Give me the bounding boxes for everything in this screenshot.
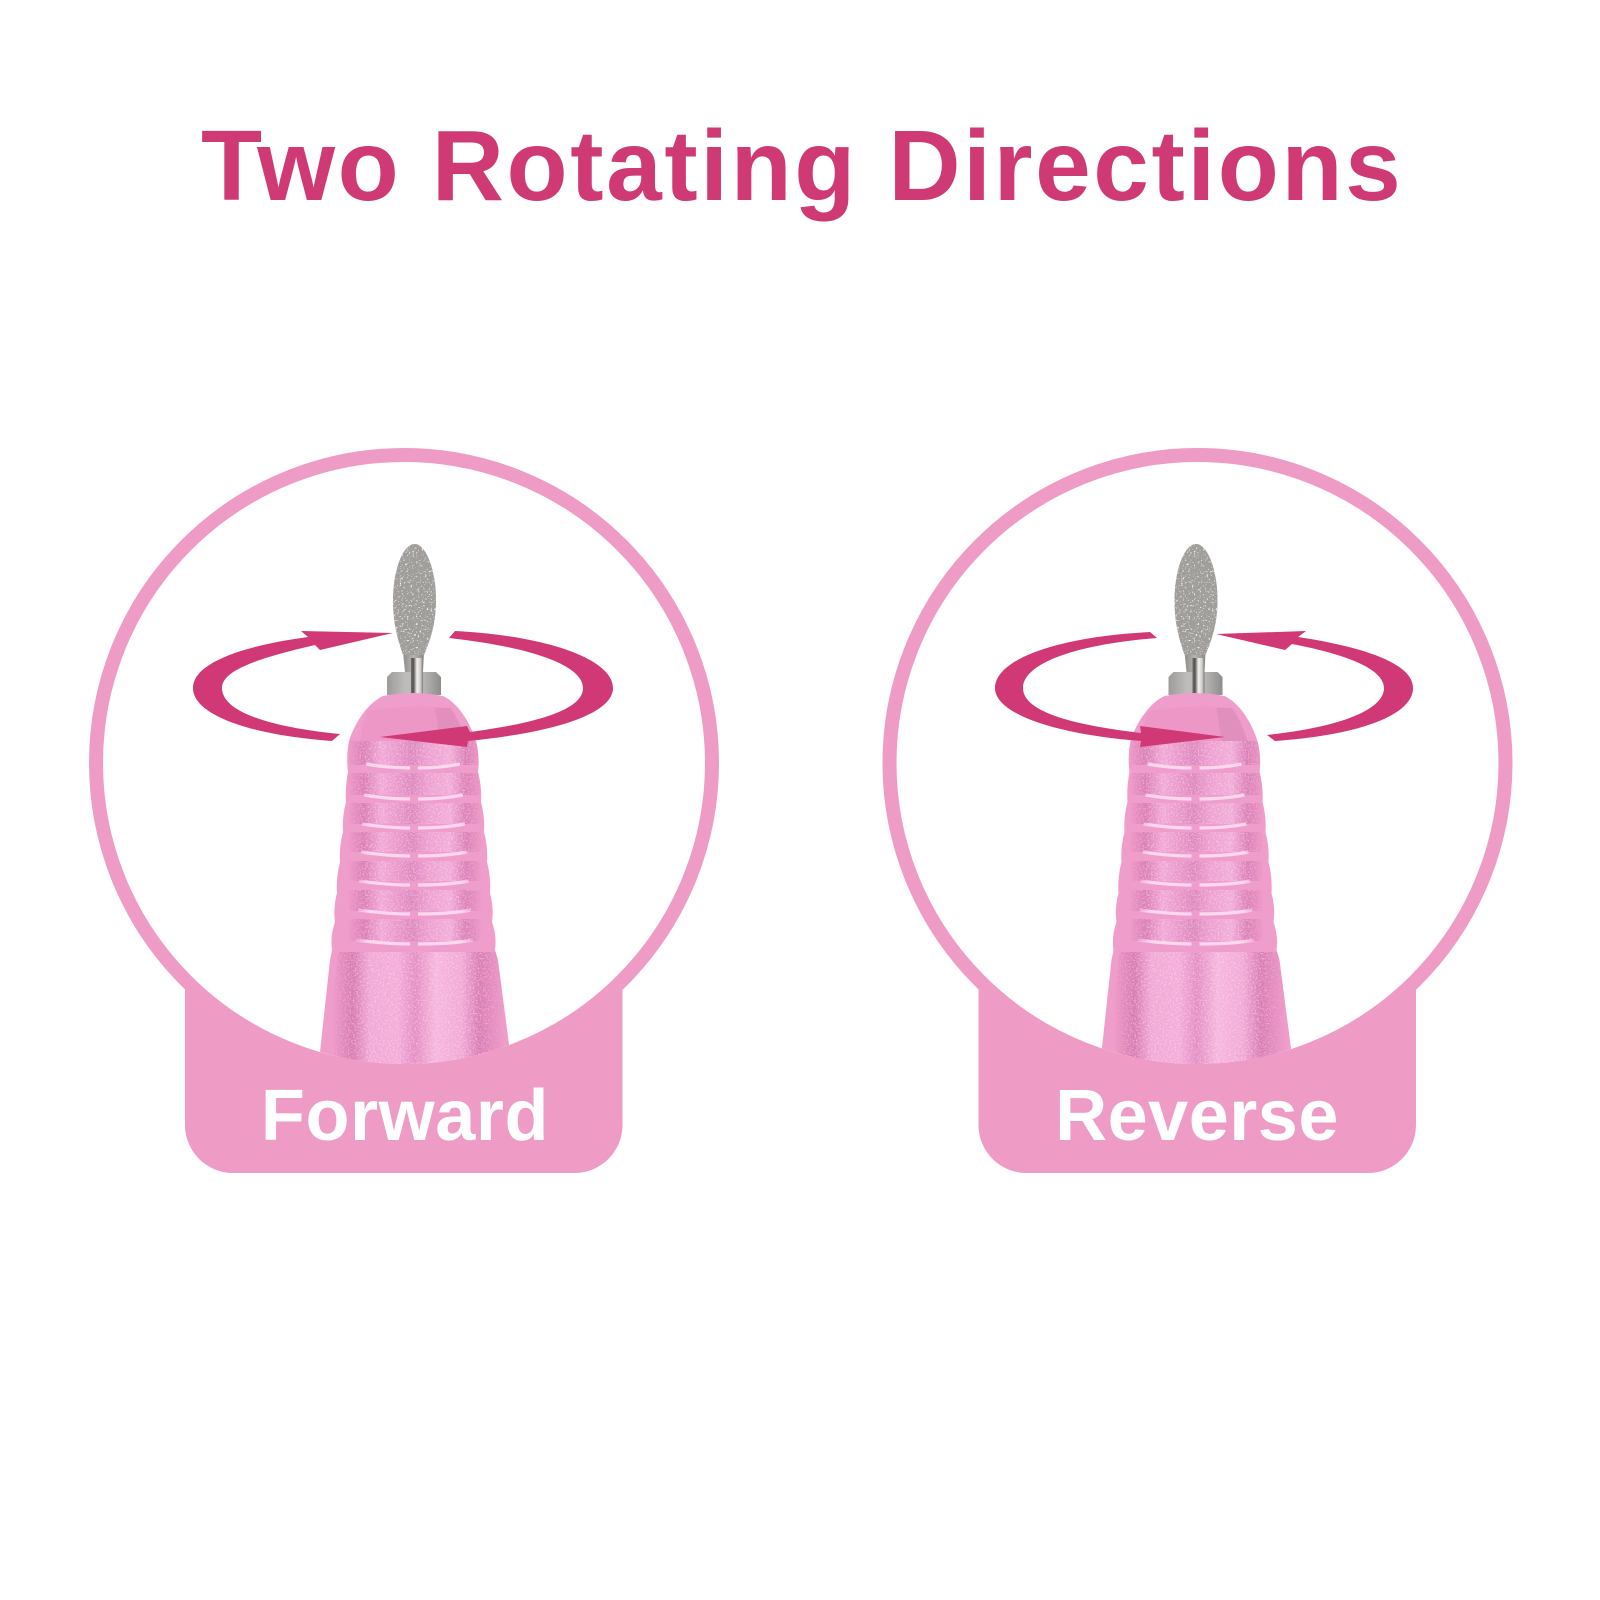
panel: forward [96, 455, 712, 1173]
arrow: forward rotation, upper left arc [193, 631, 393, 741]
arrow: reverse rotation, left arc [995, 632, 1225, 747]
icon: drill handle and bit [315, 544, 515, 1080]
icon: drill handle and bit [1096, 544, 1296, 1080]
label: reverse: Reverse [1055, 1076, 1339, 1156]
arrow: reverse rotation, right arc [1216, 631, 1413, 741]
label tab: forward [185, 988, 622, 1173]
panel: reverse [890, 455, 1506, 1173]
ring: reverse [890, 455, 1506, 1071]
label tab: reverse [978, 988, 1416, 1173]
arrow: forward rotation, lower right arc [380, 631, 613, 747]
ring: forward [96, 455, 712, 1071]
label: forward: Forward [261, 1076, 549, 1156]
title: Two Rotating Directions [201, 110, 1403, 222]
